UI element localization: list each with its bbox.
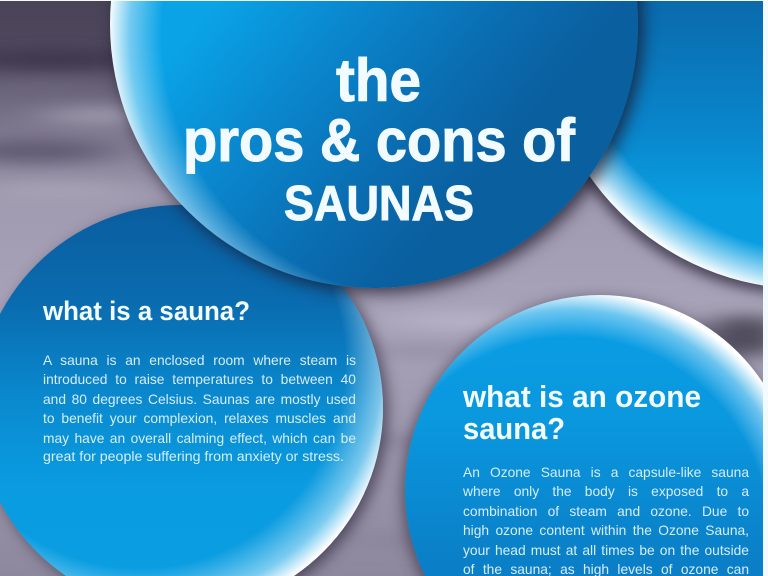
title: the pros & cons of saunas: pros & cons of	[183, 107, 576, 174]
panel: title circle	[110, 0, 638, 288]
text block: sauna definition: A sauna is an enclosed room where steam is	[43, 353, 356, 368]
panel: what is a sauna	[0, 205, 383, 576]
text block: sauna definition: and 80 degrees Celsius. Saunas are mostly used	[43, 392, 356, 407]
text block: sauna definition: introduced to raise temperatures to between 40	[43, 372, 356, 387]
text block: sauna definition: to benefit your complexion, relaxes muscles and	[43, 411, 356, 426]
text block: sauna definition: may have an overall calming effect, which can be	[43, 431, 356, 446]
text block: sauna definition	[43, 353, 356, 465]
text block: ozone sauna definition: where only the body is exposed to a	[463, 484, 749, 499]
text block: ozone sauna definition: An Ozone Sauna is a capsule-like sauna	[463, 465, 749, 480]
title: the pros & cons of saunas: SAUNAS	[284, 177, 474, 231]
title: the pros & cons of saunas	[183, 47, 576, 231]
text block: ozone sauna definition	[463, 465, 750, 576]
text block: sauna definition: great for people suffering from anxiety or stress.	[43, 449, 344, 465]
heading: what is an ozone sauna: what is an ozone	[462, 379, 701, 414]
panel: what is an ozone sauna	[405, 295, 768, 576]
text block: ozone sauna definition: combination of steam and ozone. Due to	[463, 504, 749, 519]
panel: top-right decorative circle	[542, 0, 768, 289]
text block: ozone sauna definition: high ozone content within the Ozone Sauna,	[463, 523, 749, 538]
heading: what is a sauna: what is a sauna?	[42, 296, 250, 326]
title: the pros & cons of saunas: the	[336, 47, 421, 114]
heading: what is an ozone sauna: sauna?	[463, 411, 565, 446]
text block: ozone sauna definition: your head must at all times be on the outside	[463, 543, 749, 558]
heading: what is an ozone sauna	[462, 379, 701, 446]
